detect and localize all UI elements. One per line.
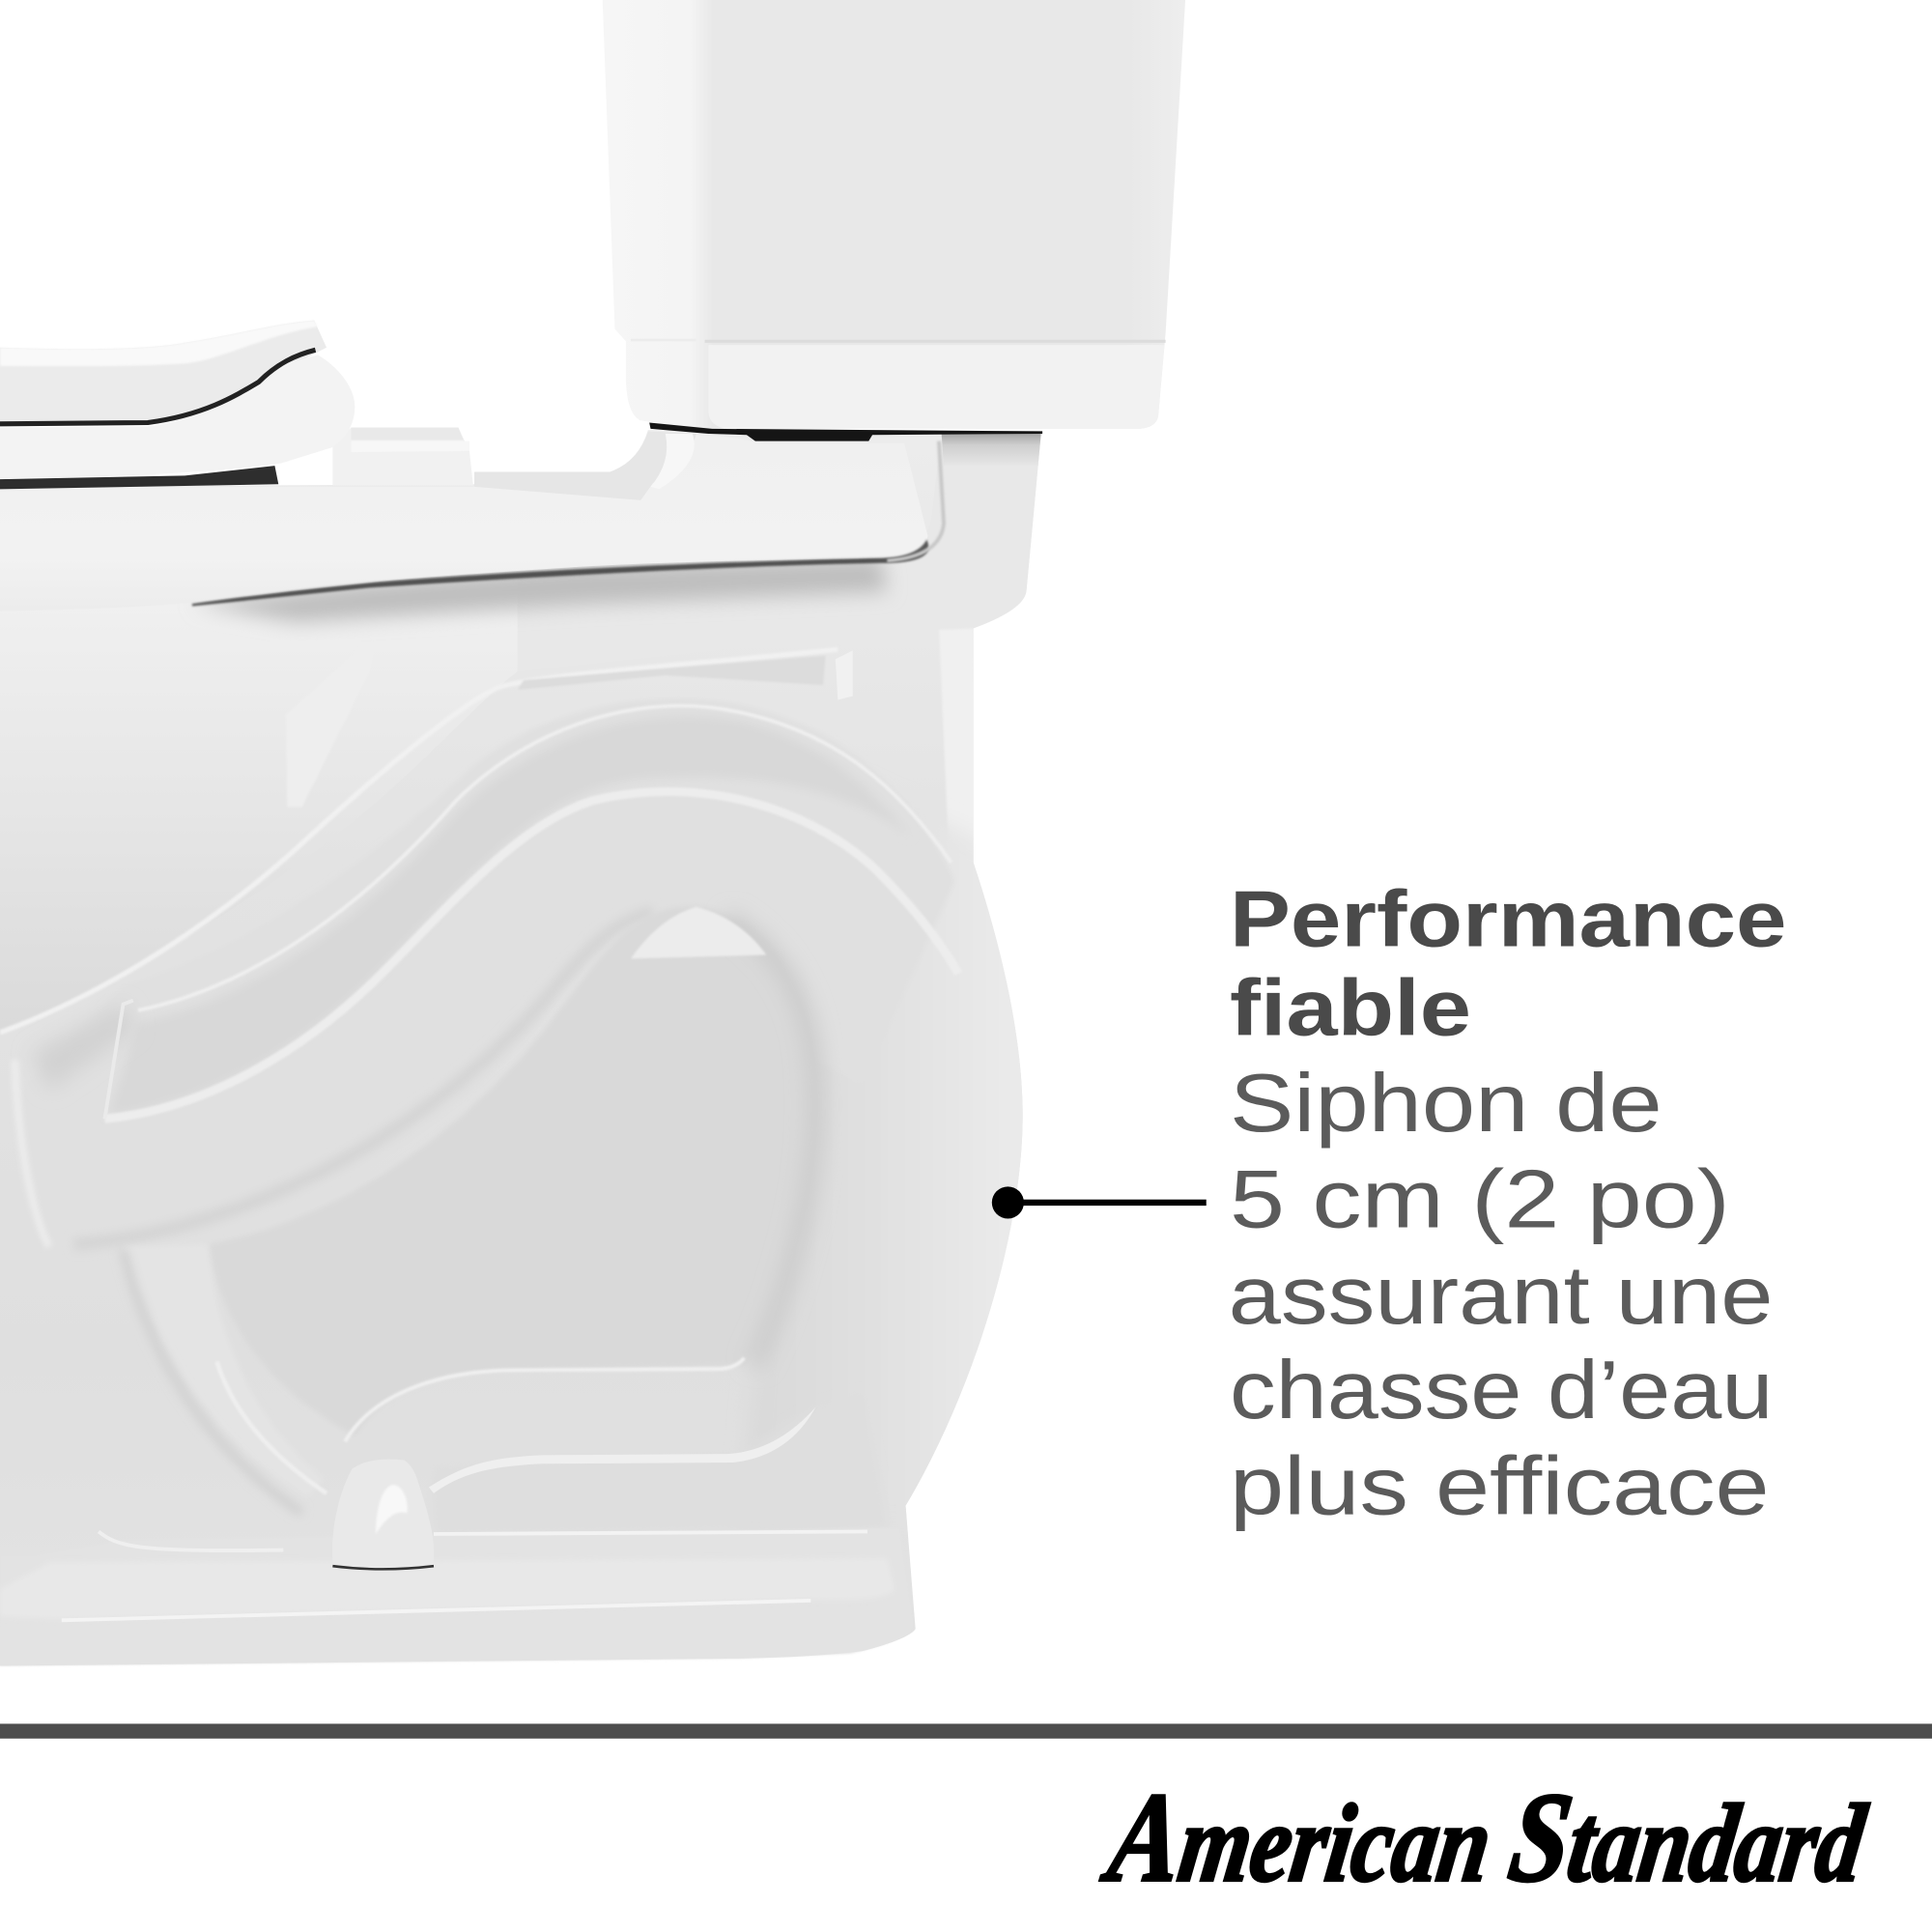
cistern gasket [649,423,1042,441]
callout body: assurant une [1229,1250,1773,1342]
callout body: 5 cm (2 po) [1230,1153,1730,1245]
callout heading [1230,874,1786,1052]
rim shadow gap [192,540,928,607]
lower crease highlight [429,1407,815,1493]
seat hinge block [332,428,473,486]
rear column [941,631,974,831]
callout heading: fiable [1230,962,1471,1052]
callout body [1229,1058,1773,1533]
recessed side panel [479,908,779,1109]
bowl edge line [0,649,838,1033]
bright stripe along trapway [104,791,958,1119]
right flank shading [950,833,1022,1360]
down tube shadow [124,1249,301,1513]
bolt cap [332,1460,434,1569]
lid top surface [0,321,318,366]
light panel inside the loop [631,907,766,958]
bowl highlight [286,635,376,807]
lid [0,321,327,424]
brand logo: American [1095,1766,1501,1908]
pipe end edge [104,1001,133,1119]
callout body: plus efficace [1230,1441,1770,1533]
window under rim [518,656,826,690]
brand logo: Standard [1502,1766,1876,1908]
small bracket [836,650,853,699]
clipped body modelling [0,431,1042,1534]
toilet illustration [0,0,1185,1665]
neck shadow below the tank [941,434,1041,460]
trap tube [23,698,955,1249]
pipe outlet light edge [14,1060,49,1247]
bowl [0,579,518,1033]
lid seam [0,350,316,424]
shade on tube underside [74,912,653,1244]
cistern tank [603,0,1185,429]
right side rim seam [887,441,944,560]
down tube body [124,1244,323,1497]
rim [0,430,927,611]
seat ring and hinge bulb [0,355,355,478]
shade under bowl [38,1013,128,1080]
back neck under the cistern [469,433,1042,671]
base ledge [0,1528,913,1665]
callout body: chasse d’eau [1230,1345,1773,1436]
upper crease line [138,706,952,1010]
callout leader line and dot [992,1186,1207,1218]
panel crease curve [345,1358,744,1441]
rim notch shading [474,431,696,500]
inner trap soft shadow [727,918,816,1365]
toilet seat [0,321,355,489]
callout heading: Performance [1230,874,1786,964]
footer divider [0,1723,1932,1739]
lower panel fill [431,1392,887,1534]
gap under seat [0,466,278,489]
brand logo [1095,1766,1876,1908]
tube highlight near the bolt cap [216,1361,327,1493]
shadow cast below the rim [192,558,887,622]
toilet body silhouette [0,430,1041,1665]
band of shade between creases [108,716,912,1115]
callout text [1229,874,1786,1533]
callout body: Siphon de [1230,1058,1662,1150]
